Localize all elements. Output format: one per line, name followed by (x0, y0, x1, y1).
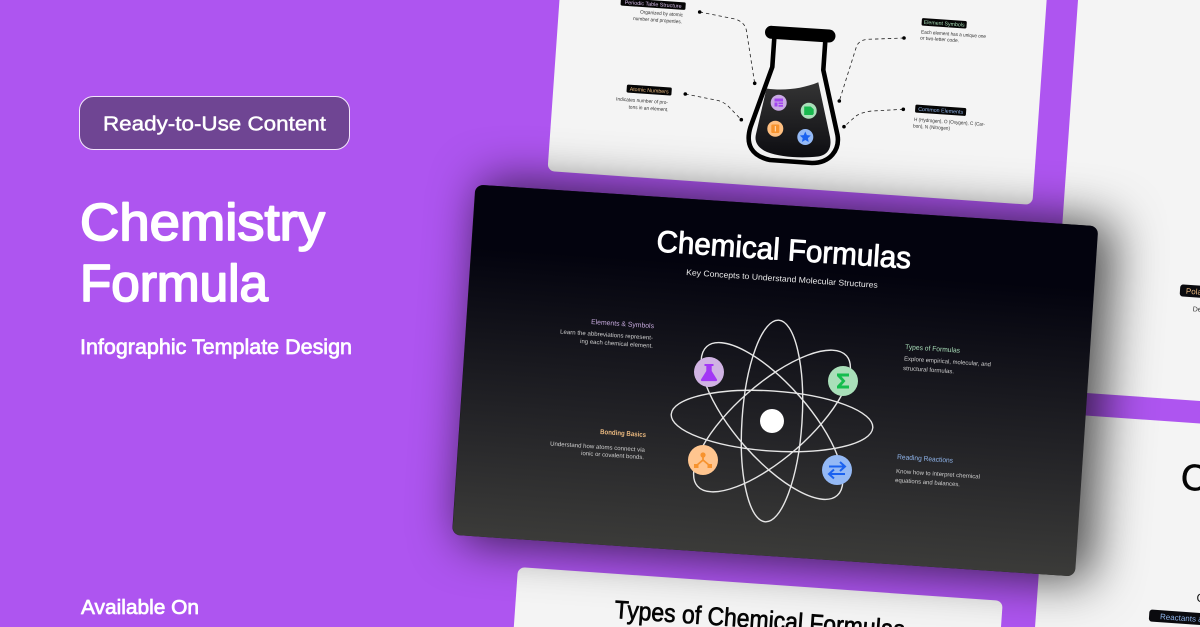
icon: green tag badge (801, 103, 817, 119)
text block: elements and symbols: Elements & Symbols (591, 319, 655, 330)
label: element symbols: Element Symbols (923, 20, 965, 29)
panel: upper right slide (1051, 0, 1200, 425)
text block: reading reactions: Reading Reactions (897, 454, 954, 465)
text block: elements and symbols (560, 319, 655, 350)
label: common elements: Common Elements (918, 107, 964, 116)
text block: reading reactions (895, 454, 980, 488)
text: element symbols description: or two-letter code. (920, 36, 959, 44)
text block: elements and symbols: ing each chemical element. (580, 339, 653, 350)
text: element symbols description: Each element has a unique one (921, 30, 986, 40)
text block: types of formulas: Explore empirical, molecular, and (904, 357, 991, 368)
text block: elements and symbols: Learn the abbreviations represent- (560, 330, 653, 342)
chart: atom diagram (664, 313, 880, 529)
text block: types of formulas: Types of Formulas (905, 344, 961, 355)
title (80, 194, 325, 313)
arrow: periodic table connector (698, 10, 756, 85)
badge: ready-to-use content (80, 96, 350, 150)
title: Formula (80, 255, 268, 313)
text: common elements description: H (Hydrogen), O (Oxygen), C (Car- (914, 117, 985, 128)
nucleus (760, 409, 784, 433)
text: common elements description (913, 117, 985, 132)
panel: lower right slide (1022, 413, 1200, 627)
text: atomic numbers description: Indicates number of pro- (616, 97, 668, 106)
label: polarity pill (1180, 284, 1200, 301)
text: periodic table description: Organized by atomic (640, 10, 684, 19)
icon: network badge (688, 445, 718, 475)
icon: flask (749, 32, 838, 163)
subheading: Key Concepts to Understand Molecular Structures (686, 268, 878, 290)
text: available on: Available On (81, 597, 199, 619)
title: Chemistry (80, 194, 325, 252)
text block: bonding basics: ionic or covalent bonds. (581, 451, 644, 461)
panel: bottom slide (497, 567, 1003, 627)
text: element symbols description (920, 30, 986, 44)
label: reactants pill (1149, 609, 1200, 627)
heading: chemical formulas: Chemical Formulas (656, 225, 912, 276)
text block: bonding basics (550, 429, 646, 461)
text: common elements description: bon), N (Nitrogen) (913, 124, 950, 132)
icon: orange number badge (767, 121, 783, 137)
shadow of main slide (452, 185, 1098, 576)
text block: reading reactions: Know how to interpret chemical (896, 469, 980, 481)
badge: ready-to-use content: Ready-to-Use Content (103, 112, 326, 136)
text: atomic numbers description: tons in an element. (628, 105, 669, 113)
text block: bonding basics: Understand how atoms connect via (550, 442, 646, 454)
text: periodic table description (633, 10, 684, 25)
text block: types of formulas: structural formulas. (903, 366, 954, 375)
label: periodic table structure: Periodic Table Structure (624, 0, 682, 10)
icon: flask badge (694, 357, 724, 387)
label: atomic numbers: Atomic Numbers (629, 87, 669, 95)
text block: reading reactions: equations and balances. (895, 478, 960, 488)
arrow: element symbols connector (838, 36, 906, 103)
icon: sigma badge (828, 366, 858, 396)
text: periodic table description: number and properties. (633, 16, 682, 25)
text: atomic numbers description (616, 97, 669, 113)
icon: exchange arrows badge (822, 455, 852, 485)
label: atomic numbers (626, 84, 672, 96)
text block: types of formulas (903, 344, 991, 375)
panel: main dark slide (452, 185, 1098, 576)
text block: bonding basics: Bonding Basics (600, 429, 646, 439)
icon: purple table badge (771, 95, 787, 111)
panel: top slide (548, 0, 1053, 205)
subtitle: Infographic Template Design (80, 336, 352, 359)
icon: blue star badge (797, 129, 813, 145)
arrow: common elements connector (842, 108, 905, 128)
arrow: atomic numbers connector (684, 92, 743, 121)
